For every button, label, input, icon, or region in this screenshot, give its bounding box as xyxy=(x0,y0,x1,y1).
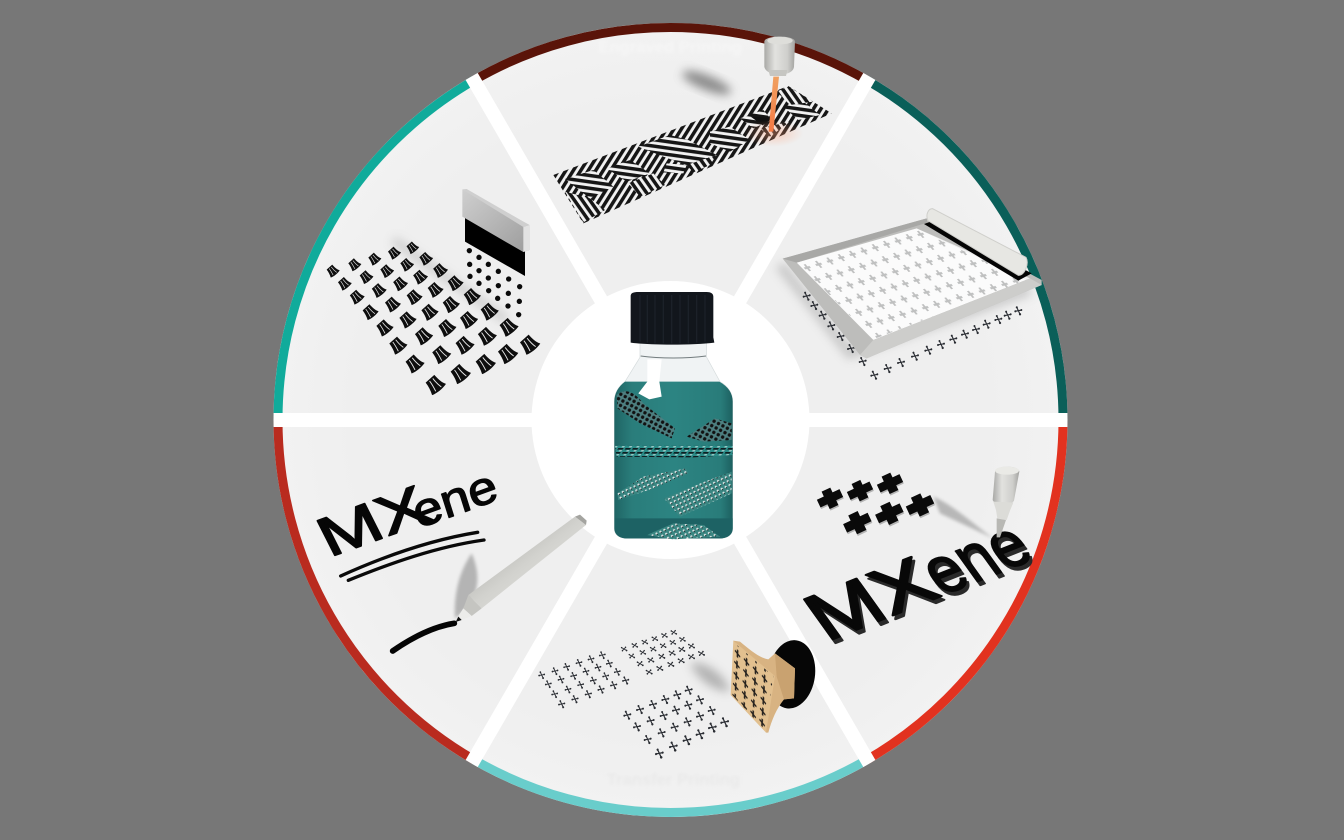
neck ring xyxy=(641,356,706,358)
panel: marker writing xyxy=(306,459,587,651)
ink strip xyxy=(924,221,1032,281)
panel: screen printing xyxy=(780,209,1042,381)
inkjet head xyxy=(462,189,529,276)
faint label: laser: Engraved Printing xyxy=(598,38,742,57)
drawn stroke xyxy=(393,623,454,651)
3D MXene word: ene xyxy=(905,507,1046,609)
ring: top xyxy=(474,28,867,80)
stamp shadow xyxy=(690,663,730,692)
flake: middle band xyxy=(615,446,733,457)
ring: upper left xyxy=(278,80,474,420)
stamp xyxy=(731,637,820,733)
syringe shadow xyxy=(933,497,993,538)
handwritten MXene: MX xyxy=(306,474,440,568)
printed crosses xyxy=(801,290,1024,381)
engraved dark spot xyxy=(751,117,773,125)
printed blocks xyxy=(815,469,937,539)
faint label: stamp: Transfer Printing xyxy=(607,770,740,789)
3D MXene word xyxy=(790,507,1049,658)
centre white circle xyxy=(532,281,810,559)
ring: upper right xyxy=(867,80,1063,420)
3D MXene word: MX xyxy=(790,544,952,655)
sector dividers xyxy=(270,74,1071,766)
panel: inkjet printing xyxy=(325,189,541,396)
frame xyxy=(783,218,1042,358)
liquid xyxy=(614,382,733,538)
outer ring segments xyxy=(278,28,1063,812)
printed tile grid xyxy=(325,240,541,396)
liquid bottom xyxy=(615,518,733,538)
handwritten MXene: ene xyxy=(406,459,503,538)
crosses group: upper middle xyxy=(619,628,706,677)
flake: upper right xyxy=(687,418,732,442)
glass highlight xyxy=(638,359,662,399)
3D MXene word: MX xyxy=(793,548,955,658)
mesh crosses xyxy=(798,229,1027,339)
laser glow xyxy=(743,120,803,147)
laser nozzle xyxy=(764,37,795,76)
centre ink bottle xyxy=(614,292,733,539)
marker pen xyxy=(456,515,587,622)
screen mesh xyxy=(797,228,1027,340)
bottle glass xyxy=(614,343,733,538)
crosses group: lower xyxy=(622,684,731,760)
panel: direct ink writing xyxy=(790,467,1049,658)
panel: stamp printing xyxy=(537,628,820,789)
cap xyxy=(631,292,714,345)
panel: laser engraving xyxy=(553,37,832,223)
ink droplets xyxy=(467,248,522,317)
syringe xyxy=(993,467,1019,537)
ring: bottom xyxy=(474,760,867,812)
frame shadow xyxy=(780,265,1030,353)
3D MXene word: ene xyxy=(908,511,1049,613)
double underline xyxy=(341,532,484,580)
ring: lower right xyxy=(867,420,1063,760)
flake: upper left xyxy=(617,391,675,438)
pen shadow xyxy=(455,553,477,618)
ring: lower left xyxy=(278,420,474,760)
handwritten MXene xyxy=(306,459,503,568)
patterned MXene strip xyxy=(553,86,832,223)
tile shadow xyxy=(393,240,507,320)
roller xyxy=(927,209,1027,275)
crosses group: left xyxy=(537,650,631,710)
flake: lower left xyxy=(617,468,688,500)
nozzle shadow xyxy=(680,66,734,99)
laser beam xyxy=(769,77,779,132)
flake: bottom xyxy=(647,523,720,539)
flake: lower right xyxy=(664,472,732,517)
process wheel disc xyxy=(274,23,1068,817)
